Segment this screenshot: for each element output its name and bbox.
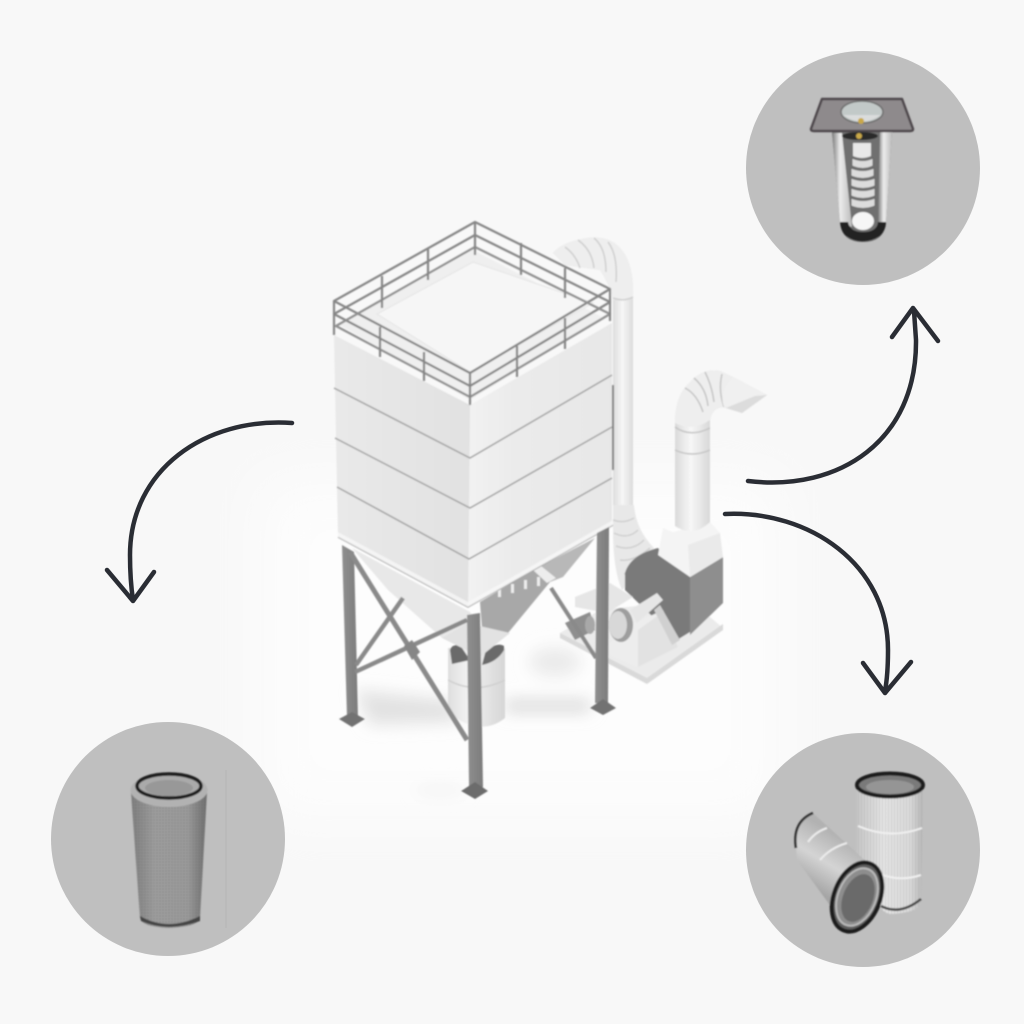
mesh cartridge filter <box>130 773 208 928</box>
large duct with elbow <box>553 238 654 590</box>
duct access ladder <box>612 385 614 470</box>
blower: motor assembly <box>565 583 680 667</box>
roof <box>340 250 604 400</box>
right leg and foot <box>590 527 616 715</box>
hopper access latches <box>498 566 556 597</box>
cross bracing <box>350 552 596 740</box>
blower: housing right face <box>690 557 723 635</box>
dust drum <box>448 645 505 727</box>
pair of pleated cartridge filters <box>795 774 923 939</box>
dust collector machine <box>334 222 767 799</box>
hopper <box>352 538 595 657</box>
silo panel lines <box>334 375 613 607</box>
left front leg and foot <box>339 545 365 727</box>
pulse cartridge filter with square flange <box>811 99 913 242</box>
filter circle: top right <box>746 51 980 285</box>
silo body left face <box>334 335 470 607</box>
soft white glow behind the machine <box>260 480 780 820</box>
brace gusset <box>404 640 420 660</box>
roof inner panel <box>377 262 593 372</box>
arrow: machine to bottom-left filter <box>107 423 292 601</box>
silo body right face <box>468 323 612 607</box>
blower: housing left face <box>625 548 690 640</box>
blower: collar <box>658 522 723 577</box>
upright pleated filter <box>857 774 923 914</box>
filter circle: bottom left <box>51 722 285 956</box>
blower: base plate edge <box>560 624 723 684</box>
railing <box>334 222 610 405</box>
centre leg and foot <box>461 613 488 799</box>
filter circle: bottom right <box>746 733 980 967</box>
exhaust stack with nozzle <box>675 370 767 531</box>
arrow: machine to top-right filter <box>748 308 938 482</box>
blower: base plate <box>560 600 723 682</box>
silo bottom lip <box>338 520 613 607</box>
arrow: machine to bottom-right filter <box>725 514 911 693</box>
tilted pleated filter <box>795 813 892 939</box>
ground shadows <box>355 647 590 794</box>
